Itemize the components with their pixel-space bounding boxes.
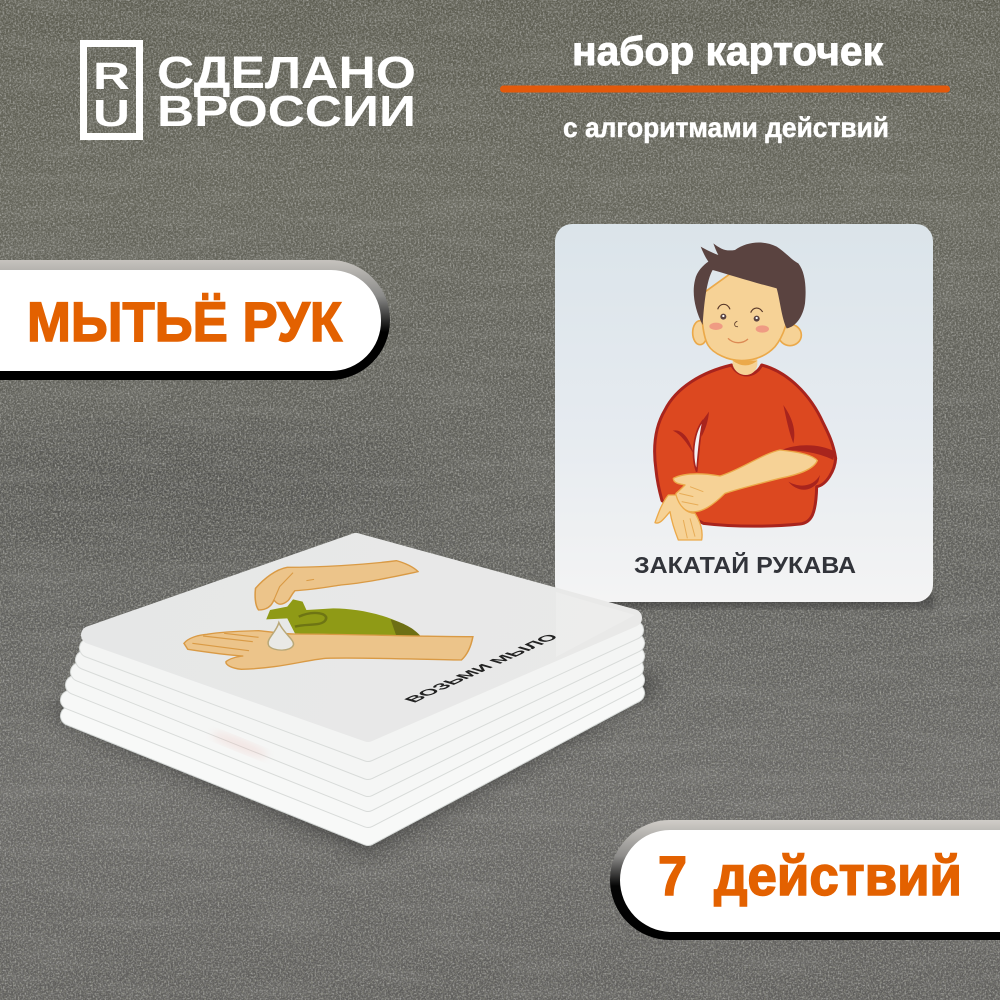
soap drop: [268, 623, 294, 650]
heading: set of cards: [500, 28, 950, 143]
sleeve fold: [782, 405, 835, 490]
neck: [733, 358, 757, 375]
subheading: с алгоритмами действий: [563, 112, 889, 143]
logo text: ВРОССИИ: [157, 87, 416, 136]
lower hand: [184, 631, 473, 669]
orange divider line: [500, 86, 950, 92]
logo frame with RU: [84, 44, 140, 136]
banner title: МЫТЬЁ РУК: [27, 290, 343, 353]
soap bottle: [266, 599, 420, 636]
logo frame with RU: R: [93, 56, 130, 98]
stack of acrylic cards: [55, 542, 655, 852]
sweater: [655, 365, 836, 526]
lower hand: [655, 495, 702, 540]
forearm and upper hand: [673, 450, 817, 512]
banner white pill: [0, 270, 381, 371]
logo: сделано в России: [84, 44, 416, 136]
card body: [555, 224, 933, 602]
logo text: СДЕЛАНО: [157, 47, 416, 98]
bottle cap swirl: [295, 613, 326, 627]
faint red print-through: [210, 728, 270, 762]
stack shadow: [55, 670, 655, 852]
title banner: hand washing: [0, 260, 390, 380]
standing card: roll up sleeves: [555, 224, 934, 608]
banner outer ring: [610, 820, 1000, 940]
face features: [709, 304, 769, 343]
illustration: taking soap: [184, 561, 473, 669]
head: [698, 267, 787, 360]
upper hand: [255, 561, 418, 610]
count banner: 7 actions: [610, 820, 1000, 940]
heading: set of cards: набор карточек: [572, 28, 883, 74]
hair: [694, 243, 806, 328]
banner text: действий: [714, 844, 962, 907]
logo frame with RU: U: [93, 93, 130, 135]
logo text: [157, 47, 416, 136]
stacked card edges: [70, 543, 635, 836]
banner white pill: [620, 830, 1000, 932]
illustration: boy rolling up sleeve: [655, 243, 836, 540]
underarm gap: [694, 420, 703, 472]
ears: [693, 321, 707, 345]
card caption: ЗАКАТАЙ РУКАВА: [634, 551, 856, 578]
card caption on stack: ВОЗЬМИ МЫЛО: [399, 632, 563, 704]
top card face: [90, 542, 633, 733]
banner text: 7: [658, 844, 687, 907]
banner outer ring: [0, 260, 390, 380]
reflection of standing card: [556, 592, 635, 657]
